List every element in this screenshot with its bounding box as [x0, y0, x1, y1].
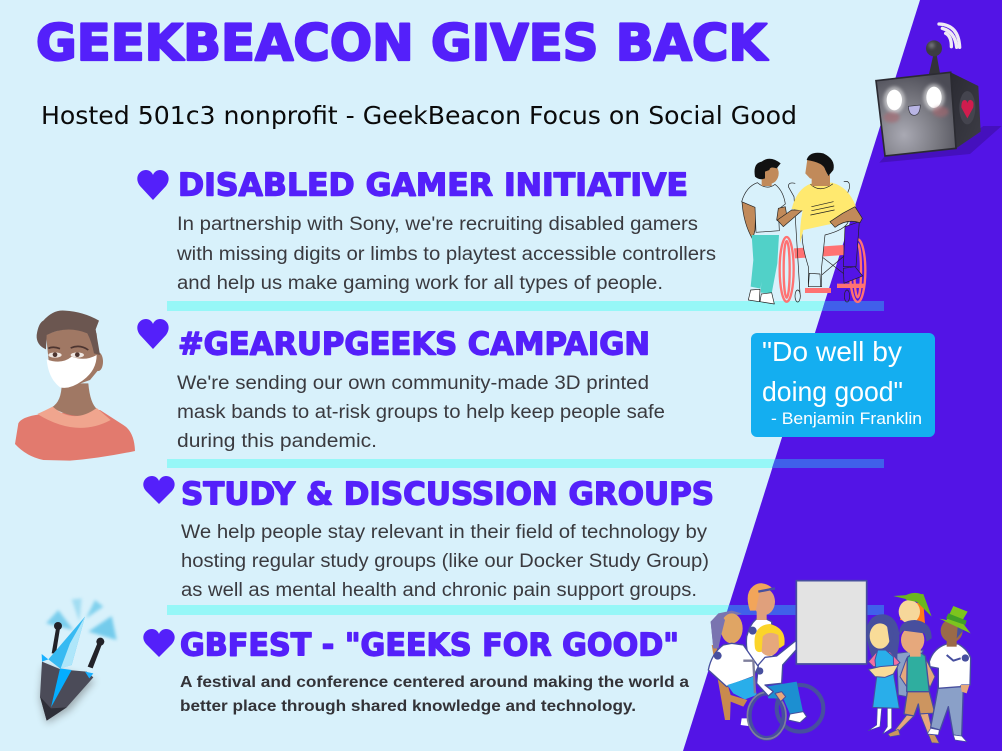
body text: We help people stay relevant in their field of technology by — [181, 522, 708, 543]
body text — [180, 674, 689, 715]
icon: heart — [137, 319, 169, 349]
body text: with missing digits or limbs to playtest accessible controllers — [176, 244, 716, 265]
callout: quote: - Benjamin Franklin — [771, 409, 922, 428]
icon: heart — [143, 476, 175, 504]
body text: during this pandemic. — [177, 431, 377, 452]
wheelchair — [777, 685, 823, 732]
whiteboard — [796, 581, 867, 664]
boy in green tank — [900, 657, 935, 687]
body text: We're sending our own community-made 3D printed — [177, 373, 649, 394]
back person left — [746, 617, 773, 667]
seated woman — [712, 645, 747, 720]
body text — [176, 214, 716, 294]
panel: study and discussion groups — [143, 476, 714, 601]
icon: heart — [143, 629, 175, 657]
icon: beacon logo — [40, 598, 117, 723]
green hat person back — [900, 602, 925, 623]
body text: A festival and conference centered around making the world a — [180, 674, 689, 691]
heading: STUDY & DISCUSSION GROUPS — [181, 476, 714, 512]
callout: quote: doing good" — [762, 376, 903, 407]
right person — [802, 222, 848, 287]
heading: #GEARUPGEEKS CAMPAIGN — [178, 326, 650, 362]
body text — [177, 373, 665, 452]
panel: gearupgeeks campaign — [137, 319, 665, 452]
back torso — [897, 650, 923, 697]
title: GEEKBEACON GIVES BACK — [36, 14, 769, 72]
left person — [742, 202, 756, 239]
girl in blue dress — [867, 614, 899, 660]
panel: gbfest — [143, 628, 689, 715]
wheelchair — [780, 237, 865, 302]
heading: DISABLED GAMER INITIATIVE — [178, 168, 688, 204]
callout: quote — [751, 333, 935, 437]
body text: mask bands to at-risk groups to help keep people safe — [177, 402, 665, 423]
body text — [181, 522, 709, 601]
body text: as well as mental health and chronic pain support groups. — [181, 580, 697, 601]
heading: GBFEST - "GEEKS FOR GOOD" — [180, 628, 679, 664]
body text: better place through shared knowledge and technology. — [180, 698, 636, 715]
illustration: person and wheelchair user — [742, 153, 865, 304]
divider bars — [167, 301, 884, 615]
subtitle: Hosted 501c3 nonprofit - GeekBeacon Focus on Social Good — [41, 101, 797, 130]
callout: quote: "Do well by — [762, 336, 902, 367]
man in green hat — [931, 687, 963, 737]
icon: robot mascot — [876, 24, 1002, 163]
icon: heart — [137, 170, 169, 200]
woman in wheelchair — [765, 682, 803, 714]
illustration: person wearing mask — [15, 311, 135, 461]
illustration: group with whiteboard — [708, 581, 971, 743]
body text: hosting regular study groups (like our Docker Study Group) — [181, 551, 709, 572]
body text: In partnership with Sony, we're recruiting disabled gamers — [177, 214, 698, 235]
panel: disabled gamer initiative — [137, 168, 716, 294]
body text: and help us make gaming work for all types of people. — [177, 273, 663, 294]
purple diagonal panel — [683, 0, 1002, 751]
